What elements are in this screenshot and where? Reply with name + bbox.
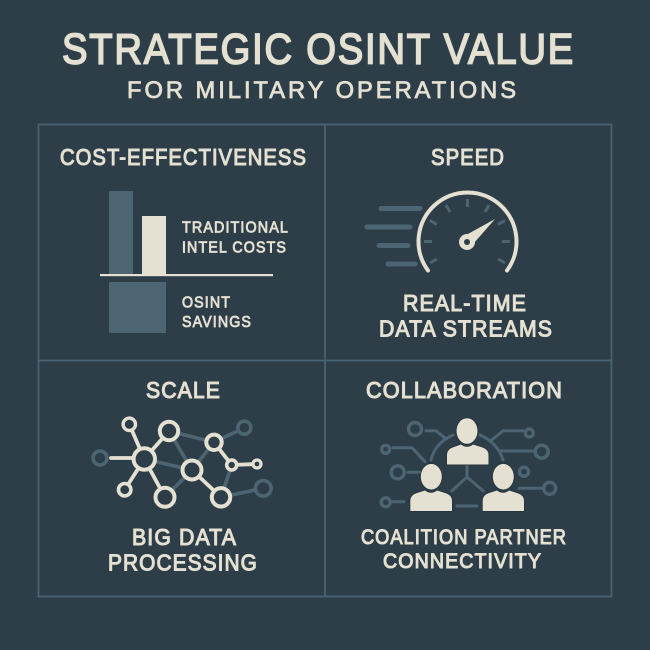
icon: speedometer gauge — [418, 193, 516, 270]
caption: big data processing: BIG DATA — [132, 524, 237, 550]
icon: connected people — [381, 418, 556, 511]
label: OSINT savings — [182, 294, 252, 331]
panel: collaboration — [361, 377, 567, 573]
heading: cost-effectiveness: COST-EFFECTIVENESS — [60, 144, 307, 170]
caption: real-time data streams — [379, 290, 553, 342]
heading: speed: SPEED — [431, 144, 505, 170]
caption: big data processing — [108, 524, 258, 576]
icon: motion lines — [367, 208, 420, 264]
caption: coalition partner connectivity — [361, 525, 567, 573]
label: traditional intel costs — [182, 220, 289, 256]
heading: scale: SCALE — [146, 377, 221, 403]
panel grid frame — [38, 124, 612, 596]
caption: real-time data streams: REAL-TIME — [403, 290, 527, 316]
caption: big data processing: PROCESSING — [108, 550, 258, 576]
label: OSINT savings: SAVINGS — [182, 314, 252, 331]
main title: STRATEGIC OSINT VALUE — [62, 26, 575, 74]
heading: collaboration: COLLABORATION — [366, 377, 563, 403]
subtitle: FOR MILITARY OPERATIONS — [127, 77, 519, 104]
caption: coalition partner connectivity: COALITION PARTNER — [361, 525, 567, 549]
caption: real-time data streams: DATA STREAMS — [379, 316, 553, 342]
label: traditional intel costs: INTEL COSTS — [182, 240, 287, 256]
panel: cost-effectiveness — [60, 144, 307, 333]
panel: speed — [367, 144, 553, 342]
bar chart: traditional costs vs OSINT savings — [100, 191, 273, 333]
icon: node network — [93, 418, 271, 507]
panel: scale — [93, 377, 271, 576]
title block — [62, 26, 575, 104]
label: traditional intel costs: TRADITIONAL — [182, 220, 289, 236]
caption: coalition partner connectivity: CONNECTIVITY — [383, 549, 542, 573]
label: OSINT savings: OSINT — [182, 294, 231, 312]
